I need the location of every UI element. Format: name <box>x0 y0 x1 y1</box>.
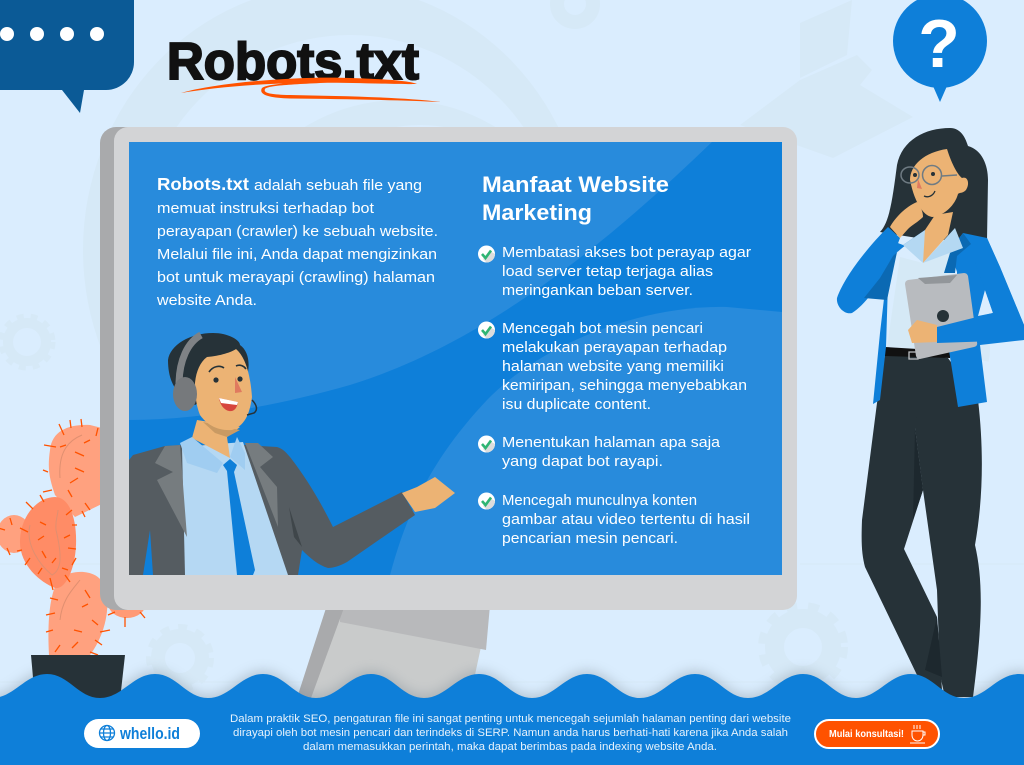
hand at chin <box>890 202 923 238</box>
benefit 4 <box>478 492 750 547</box>
benefit 1: Membatasi akses bot perayap agar <box>502 244 751 261</box>
monitor screen <box>129 142 782 575</box>
benefit 1: load server tetap terjaga alias <box>502 263 713 280</box>
footer note <box>230 713 791 753</box>
footer note: dalam memasukkan perintah, maka dapat berimbas pada indexing website Anda. <box>303 741 717 753</box>
collar <box>180 437 223 473</box>
headset <box>179 335 201 385</box>
face <box>195 349 252 430</box>
cactus pads <box>0 425 146 655</box>
left text block: adalah sebuah file yang <box>254 177 422 194</box>
shirt <box>182 442 288 575</box>
benefit 4: pencarian mesin pencari. <box>502 530 678 547</box>
benefit 3 <box>478 434 721 470</box>
hand on tablet <box>908 320 937 343</box>
monitor stand <box>297 605 490 698</box>
panel: monitor <box>100 127 797 610</box>
shirt <box>887 253 950 347</box>
eyes and brows <box>213 377 219 383</box>
benefit 2: Mencegah bot mesin pencari <box>502 320 703 337</box>
benefit 1: meringankan beban server. <box>502 282 693 299</box>
icon: globe <box>100 726 114 740</box>
left text block: perayapan (crawler) ke sebuah website. <box>157 223 438 240</box>
left text block: memuat instruksi terhadap bot <box>157 200 375 217</box>
tablet <box>905 273 977 359</box>
cactus spines <box>0 419 145 655</box>
whello.id badge <box>84 719 200 748</box>
neck and face <box>923 212 953 263</box>
glasses <box>901 166 957 184</box>
footer band <box>0 674 1024 765</box>
heading: Manfaat Website Marketing: Manfaat Website <box>482 172 669 197</box>
icon: question mark bubble <box>893 0 987 102</box>
cactus pot <box>31 655 125 700</box>
footer note: dirayapi oleh bot mesin pencari dan terindeks di SERP. Namun anda harus berhati-hati karena jika Anda salah <box>233 727 788 739</box>
hand <box>402 477 455 512</box>
button: Mulai konsultasi <box>815 720 939 748</box>
button: Mulai konsultasi: Mulai konsultasi! <box>829 728 904 740</box>
left text block <box>156 174 438 309</box>
suit <box>129 445 415 575</box>
title underline swoosh <box>181 78 441 102</box>
benefit 3: yang dapat bot rayapi. <box>502 453 663 470</box>
left text block: Melalui file ini, Anda dapat mengizinkan <box>157 246 437 263</box>
blazer body <box>873 230 1024 407</box>
benefit 2: halaman website yang memiliki <box>502 358 724 375</box>
whello.id badge: whello.id <box>119 724 180 743</box>
tie <box>223 459 255 575</box>
left text block: website Anda. <box>156 292 257 309</box>
benefit 2: isu duplicate content. <box>502 396 651 413</box>
collar <box>903 230 925 263</box>
lapels <box>155 445 187 537</box>
benefit 2: kemiripan, sehingga menyebabkan <box>502 377 747 394</box>
icon: question mark bubble: ? <box>918 6 960 82</box>
neck <box>192 420 240 458</box>
illustration: woman with tablet <box>837 128 1024 697</box>
benefit 2 <box>478 320 747 413</box>
heading: Manfaat Website Marketing: Marketing <box>482 200 592 225</box>
benefit 1 <box>478 244 751 299</box>
blazer left sleeve <box>837 227 900 313</box>
benefit 4: Mencegah munculnya konten <box>502 492 697 509</box>
left text block: bot untuk merayapi (crawling) halaman <box>157 269 435 286</box>
monitor frame <box>100 127 160 610</box>
icon: chat speech bubble <box>0 0 134 113</box>
nose <box>235 377 242 393</box>
right sleeve <box>937 238 1024 343</box>
benefit 2: melakukan perayapan terhadap <box>502 339 727 356</box>
footer note: Dalam praktik SEO, pengaturan file ini sangat penting untuk mencegah sejumlah halaman penting dari website <box>230 713 791 725</box>
heading: Manfaat Website Marketing <box>482 172 669 225</box>
cactus plant <box>0 419 146 700</box>
benefit 3: Menentukan halaman apa saja <box>502 434 721 451</box>
hair <box>880 128 988 240</box>
hair <box>168 333 249 405</box>
benefit 4: gambar atau video tertentu di hasil <box>502 511 750 528</box>
mouth <box>219 398 238 411</box>
title: Robots.txt <box>167 33 419 91</box>
trousers <box>862 349 982 697</box>
left text block: Robots.txt <box>157 174 249 194</box>
illustration: man with headset <box>129 333 455 575</box>
icon: coffee cup <box>910 725 925 743</box>
wave shadow <box>0 671 1024 765</box>
belt <box>884 347 950 358</box>
